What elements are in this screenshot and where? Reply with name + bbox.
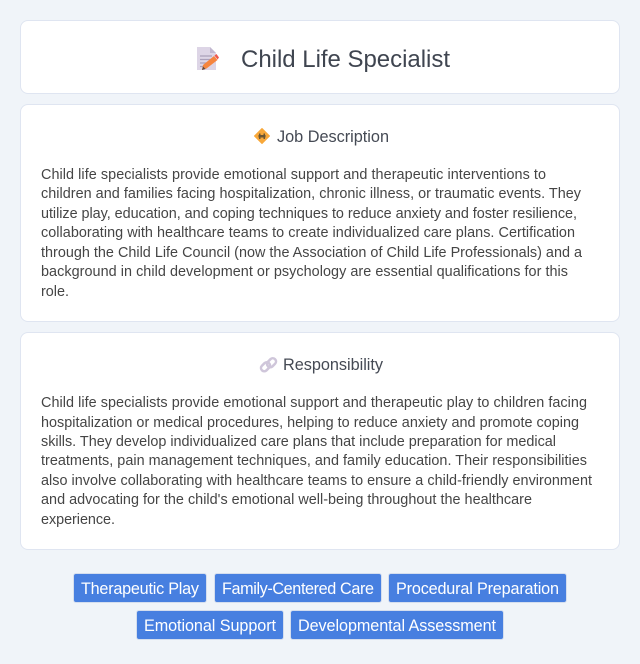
tag labels: Emotional Support [144,617,276,635]
tag: Family-Centered Care [214,573,382,603]
tag: Emotional Support [136,610,284,640]
text: responsibility body: hospitalization or medical procedures, helping to reduce anxiety and promote coping [41,415,579,431]
text: job description body: role. [41,284,69,300]
text: job description body: Child life specialists provide emotional support and therapeutic interventions to [41,167,546,183]
panel: job description card [20,104,620,322]
text: responsibility body: Child life specialists provide emotional support and therapeutic play to children facing [41,395,587,411]
title: Child Life Specialist [241,46,450,73]
text: job description body: collaborating with healthcare teams to create individualized care plans. Certification [41,225,575,241]
text: job description body [41,167,582,300]
text: responsibility body: also involve collaborating with healthcare teams to ensure a child-friendly environment [41,473,592,489]
tag labels: Family-Centered Care [222,580,374,598]
tag labels: Procedural Preparation [396,580,559,598]
text: job description body: background in child development or psychology are essential qualifications for this [41,264,568,280]
icon: memo with pencil [197,47,219,70]
tag: Therapeutic Play [73,573,207,603]
tag labels [81,580,559,635]
tag: Developmental Assessment [290,610,504,640]
text: job description body: through the Child Life Council (now the Association of Child Life Professionals) and a [41,245,582,261]
tag labels: Therapeutic Play [81,580,200,598]
text: responsibility body [41,395,592,528]
icon: chain link [260,357,277,373]
icon: construction diamond [254,128,270,144]
text: responsibility body: treatments, pain management techniques, and family education. Their responsibilities [41,453,587,469]
heading: Job Description: Job Description [277,128,389,146]
text: responsibility body: experience. [41,512,115,528]
text: responsibility body: and advocating for the child's emotional well-being throughout the healthcare [41,492,532,508]
text: job description body: utilize play, education, and coping techniques to reduce anxiety and foster resilience, [41,206,577,222]
tag: Procedural Preparation [388,573,567,603]
tag labels: Developmental Assessment [298,617,496,635]
panel: title card [20,20,620,94]
text: responsibility body: skills. They develop individualized care plans that include preparation for medical [41,434,556,450]
panel: responsibility card [20,332,620,550]
text: job description body: children and families facing hospitalization, chronic illness, or traumatic events. They [41,186,582,202]
heading: Responsibility: Responsibility [283,356,384,374]
